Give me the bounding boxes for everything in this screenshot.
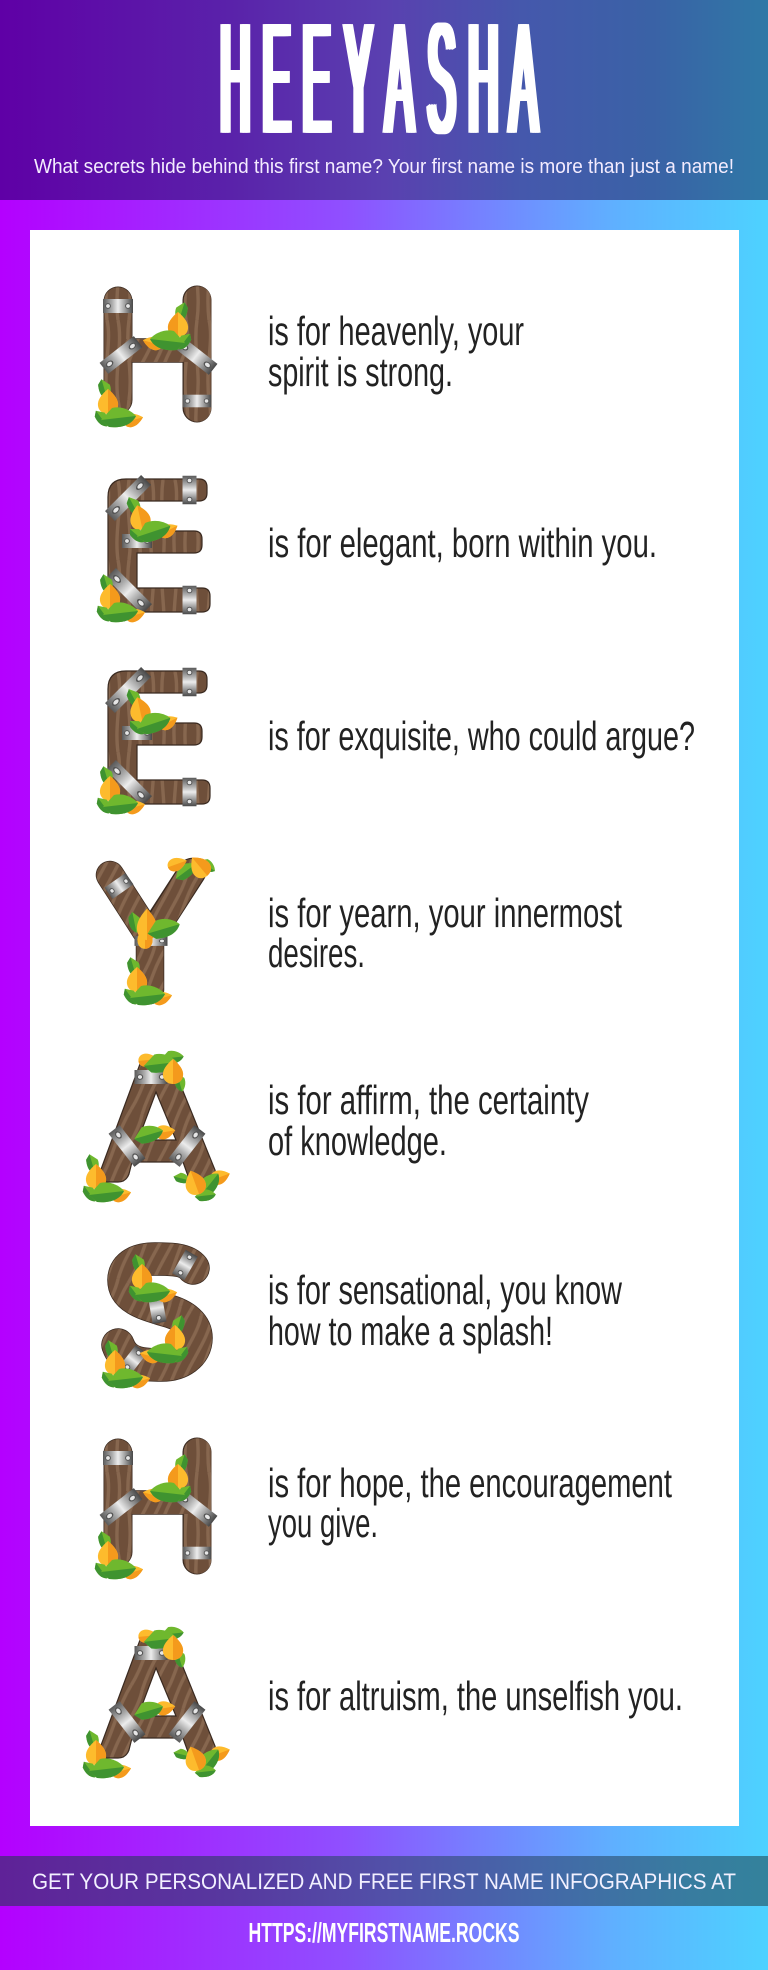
row 1: H — [92, 299, 524, 429]
text: A meaning: of knowledge. — [268, 1118, 447, 1164]
title: HEEYASHA — [220, 0, 541, 167]
text: S meaning: how to make a splash! — [268, 1308, 553, 1354]
icon: wooden letter A — [80, 1051, 232, 1204]
icon: wooden letter H — [92, 299, 217, 429]
icon: wooden letter E — [94, 667, 210, 816]
row 5: A — [80, 1051, 589, 1204]
panel: letter meanings — [30, 230, 738, 1826]
text: Y meaning: desires. — [268, 930, 365, 976]
subtitle: What secrets hide behind this first name? Your first name is more than just a name! — [34, 156, 734, 178]
text: A meaning: is for affirm, the certainty — [268, 1077, 589, 1123]
text: H meaning: spirit is strong. — [268, 349, 453, 395]
header band — [0, 0, 768, 200]
text: S meaning — [268, 1267, 622, 1354]
footer band — [0, 1856, 768, 1906]
text: H meaning — [268, 308, 524, 395]
row 8: A — [80, 1627, 683, 1780]
text: H meaning — [268, 1460, 672, 1546]
icon: wooden letter A — [80, 1627, 232, 1780]
row 6: S — [99, 1250, 622, 1390]
icon: wooden letter Y — [105, 851, 218, 1007]
text: Y meaning — [268, 890, 622, 976]
row 3: E — [94, 667, 695, 816]
icon: wooden letter H — [92, 1451, 217, 1581]
text: A meaning — [268, 1077, 589, 1164]
text: H meaning: you give. — [268, 1500, 378, 1546]
text: H meaning: is for heavenly, your — [268, 308, 524, 354]
row 7: H — [92, 1451, 672, 1581]
icon: wooden letter S — [99, 1250, 198, 1390]
icon: wooden letter E — [94, 475, 210, 624]
footer url: HTTPS://MYFIRSTNAME.ROCKS — [248, 1917, 520, 1948]
row 4: Y — [105, 851, 622, 1007]
row 2: E — [94, 475, 657, 624]
footer call to action: GET YOUR PERSONALIZED AND FREE FIRST NAME INFOGRAPHICS AT — [32, 1869, 736, 1894]
